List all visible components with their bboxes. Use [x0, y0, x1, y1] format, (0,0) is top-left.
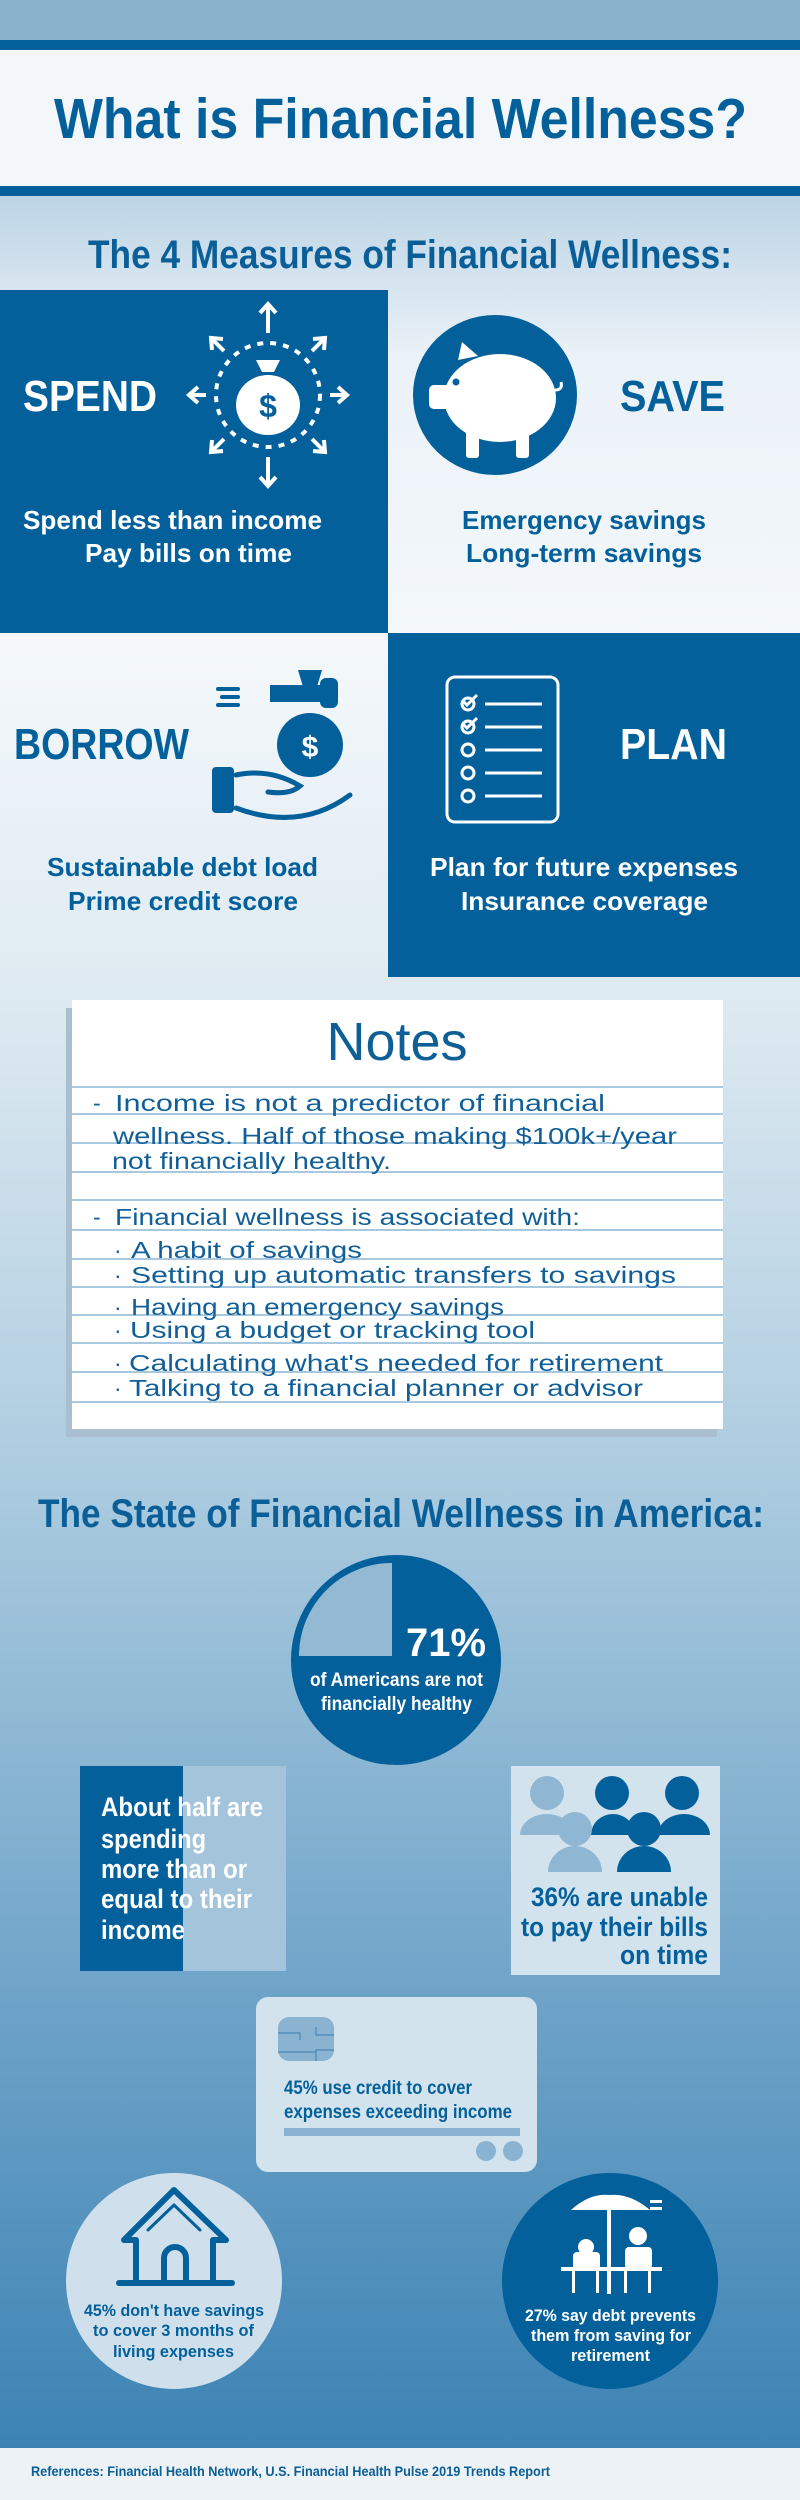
footer: references: [0, 2448, 800, 2500]
panel: spend: Spend less than income: [23, 505, 322, 535]
notes text: not financially healthy.: [112, 1148, 391, 1174]
stat: about half spending: income: [101, 1915, 185, 1945]
header band: [0, 40, 800, 196]
panel: borrow: BORROW: [14, 720, 189, 769]
notes text: Calculating what's needed for retirement: [129, 1350, 664, 1376]
panel: save: [413, 315, 725, 568]
icon: card chip: [278, 2017, 334, 2061]
stat: about half spending: spending: [101, 1824, 206, 1854]
chart: 71% pie: financially healthy: [321, 1694, 472, 1715]
stat: debt prevents retirement 27%: 27% say debt prevents: [525, 2306, 696, 2325]
notes text: ·: [114, 1237, 122, 1263]
stat: savings house 45%: to cover 3 months of: [93, 2321, 254, 2340]
subtitle: 4 measures: The 4 Measures of Financial Wellness:: [88, 233, 732, 277]
notes text: Financial wellness is associated with:: [115, 1204, 580, 1230]
stat: savings house 45%: living expenses: [113, 2342, 234, 2361]
panel: plan: [388, 633, 800, 977]
stat: about half spending: [80, 1766, 286, 1971]
icon: piggy bank: [413, 315, 577, 475]
icon: retirement beach chairs: [561, 2195, 662, 2294]
icon: checklist: [447, 677, 558, 822]
stat: about half spending: more than or: [101, 1854, 247, 1884]
stat: 36% unable to pay bills: to pay their bills: [521, 1912, 708, 1942]
panel: spend: $: [259, 388, 277, 424]
icon: money bag with arrows: [189, 304, 347, 486]
stat: about half spending: About half are: [101, 1792, 263, 1822]
chart: 71% pie: [291, 1555, 501, 1765]
notes text: wellness. Half of those making $100k+/year: [112, 1123, 677, 1149]
stat: 36% unable to pay bills: 36% are unable: [531, 1882, 708, 1912]
title: What is Financial Wellness?: [54, 87, 747, 151]
stat: credit card 45%: expenses exceeding income: [284, 2102, 512, 2123]
panel: save: Emergency savings: [462, 505, 706, 535]
notes text: -: [93, 1204, 101, 1230]
icon: hand receiving money bag: [212, 670, 350, 817]
stat: debt prevents retirement 27%: [502, 2173, 718, 2389]
stat: savings house 45%: [66, 2173, 282, 2389]
notes text: Setting up automatic transfers to savings: [131, 1262, 676, 1288]
notes text: ·: [114, 1350, 122, 1376]
stat: about half spending: equal to their: [101, 1884, 252, 1914]
notes text: Talking to a financial planner or advisor: [129, 1375, 643, 1401]
notes text: Income is not a predictor of financial: [115, 1090, 605, 1116]
chart: 71% pie: of Americans are not: [310, 1670, 484, 1691]
panel: plan: Plan for future expenses: [430, 852, 738, 882]
icon: hand receiving money bag: $: [302, 731, 319, 764]
icon: house: [119, 2190, 232, 2283]
notes text: ·: [114, 1317, 122, 1343]
notes text: ·: [114, 1262, 122, 1288]
stat: credit card 45%: 45% use credit to cover: [284, 2078, 473, 2099]
heading: notes: Notes: [326, 1012, 468, 1072]
panel: spend: SPEND: [23, 372, 157, 421]
chart: 71% pie: 71%: [406, 1621, 486, 1665]
panel: borrow: Sustainable debt load: [47, 852, 318, 882]
notes text: ·: [114, 1375, 122, 1401]
panel: borrow: [14, 670, 350, 916]
notes text: [93, 1090, 677, 1401]
stat: 36% unable to pay bills: [511, 1766, 720, 1975]
stat: 36% unable to pay bills: on time: [620, 1940, 708, 1970]
notes text: -: [93, 1090, 101, 1116]
panel: spend: [0, 290, 388, 633]
panel: plan: Insurance coverage: [461, 886, 708, 916]
panel: save: SAVE: [620, 372, 725, 421]
panel: borrow: Prime credit score: [68, 886, 298, 916]
stat: debt prevents retirement 27%: retirement: [571, 2346, 650, 2365]
stat: debt prevents retirement 27%: them from saving for: [531, 2326, 691, 2345]
footer: references: References: Financial Health Network, U.S. Financial Health Pulse 2019 Trends Report: [31, 2463, 550, 2479]
notes text: Using a budget or tracking tool: [130, 1317, 535, 1343]
stat: savings house 45%: 45% don't have savings: [84, 2301, 264, 2320]
panel: notes: [66, 1000, 723, 1437]
stat: credit card 45%: [256, 1997, 537, 2172]
panel: spend: Pay bills on time: [85, 538, 292, 568]
panel: plan: PLAN: [620, 720, 727, 769]
notes text: ·: [114, 1294, 122, 1320]
notes text: Having an emergency savings: [131, 1294, 504, 1320]
panel: save: Long-term savings: [466, 538, 702, 568]
icon: people group: [520, 1776, 710, 1872]
notes text: A habit of savings: [131, 1237, 362, 1263]
